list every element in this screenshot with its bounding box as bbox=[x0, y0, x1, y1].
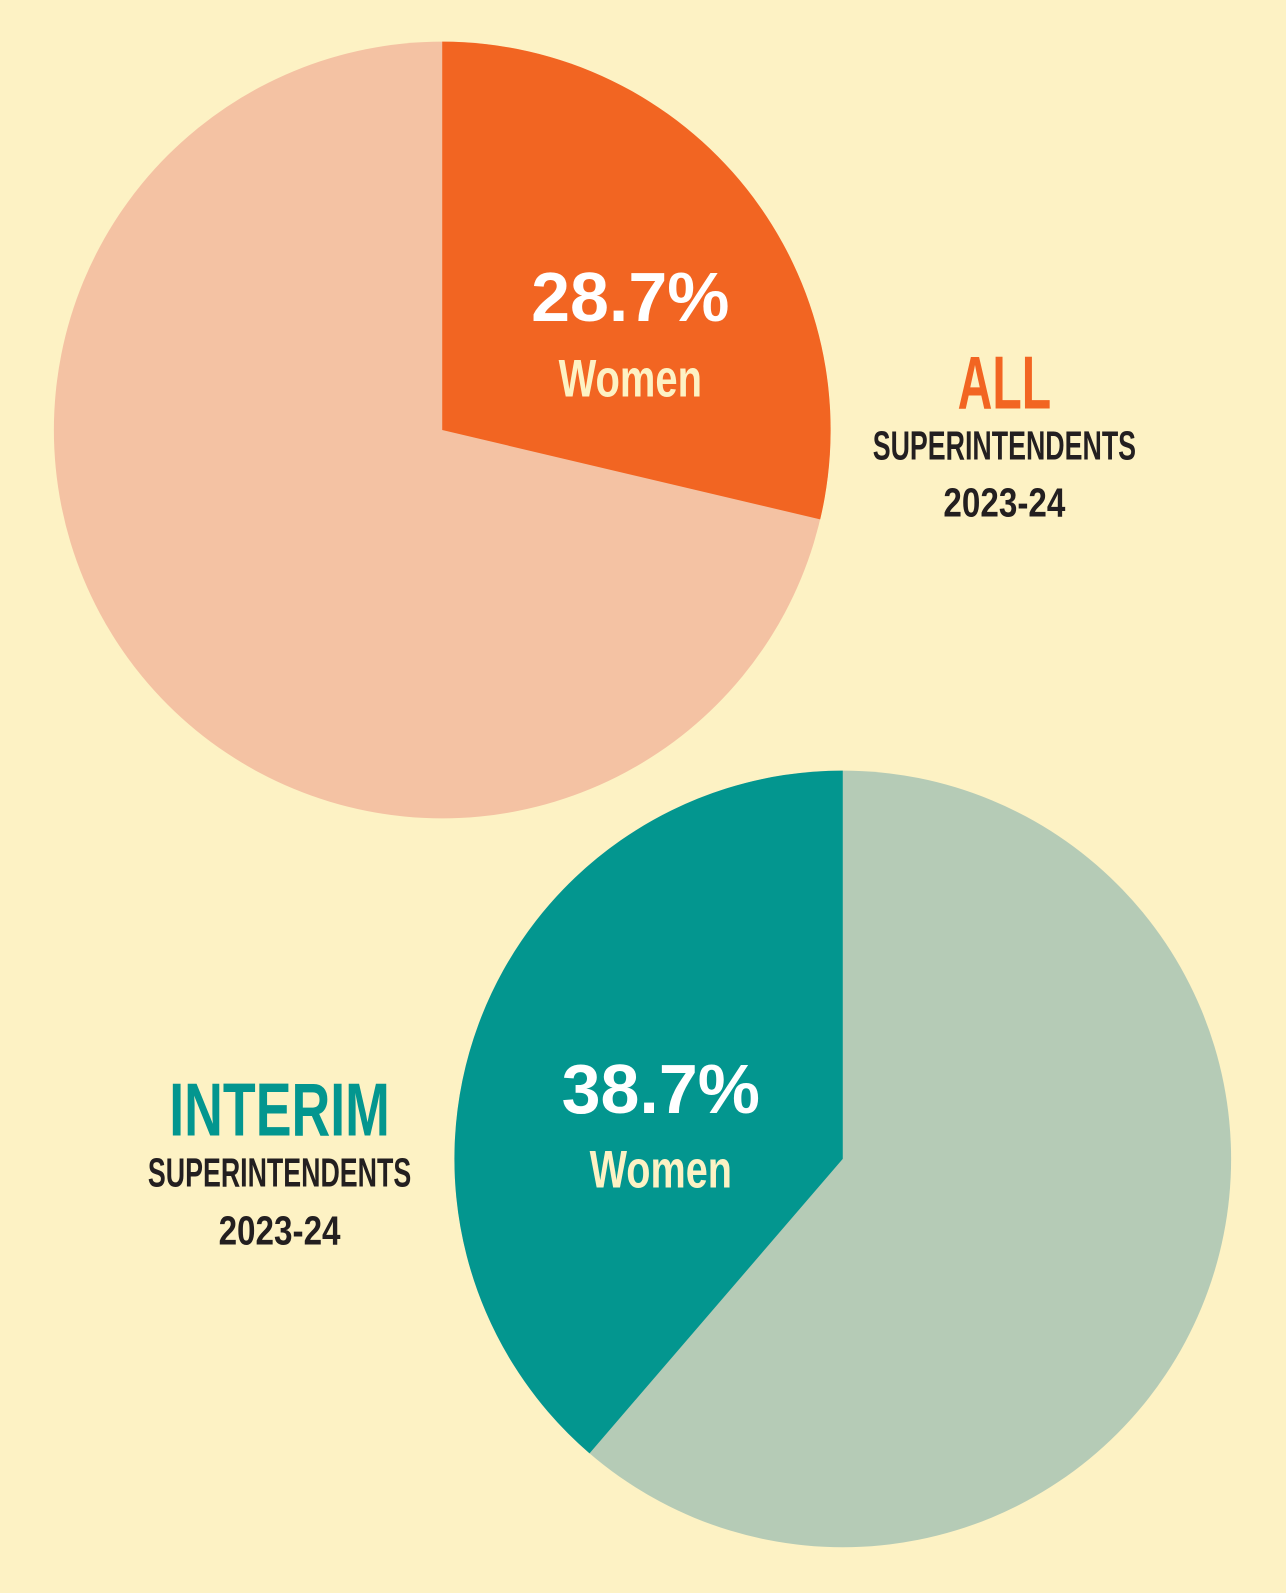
label: Women: Women bbox=[559, 349, 702, 408]
heading: interim superintendents 2023-24: SUPERINTENDENTS bbox=[148, 1149, 411, 1195]
heading: all superintendents 2023-24 bbox=[873, 341, 1136, 525]
heading: interim superintendents 2023-24: 2023-24 bbox=[219, 1207, 341, 1253]
pie chart: all superintendents bbox=[54, 42, 831, 818]
label: Women: Women bbox=[590, 1140, 732, 1199]
pie chart: interim superintendents bbox=[454, 771, 1231, 1547]
heading: interim superintendents 2023-24: INTERIM bbox=[169, 1068, 390, 1152]
heading: all superintendents 2023-24: ALL bbox=[958, 341, 1051, 425]
value label: 28.7%: 28.7% bbox=[531, 258, 729, 336]
heading: interim superintendents 2023-24 bbox=[148, 1068, 411, 1253]
heading: all superintendents 2023-24: SUPERINTENDENTS bbox=[873, 422, 1136, 468]
heading: all superintendents 2023-24: 2023-24 bbox=[943, 479, 1066, 525]
slice: women 38.7% bbox=[454, 771, 843, 1453]
slice: women 28.7% bbox=[442, 42, 831, 519]
value label: 38.7%: 38.7% bbox=[562, 1050, 760, 1128]
